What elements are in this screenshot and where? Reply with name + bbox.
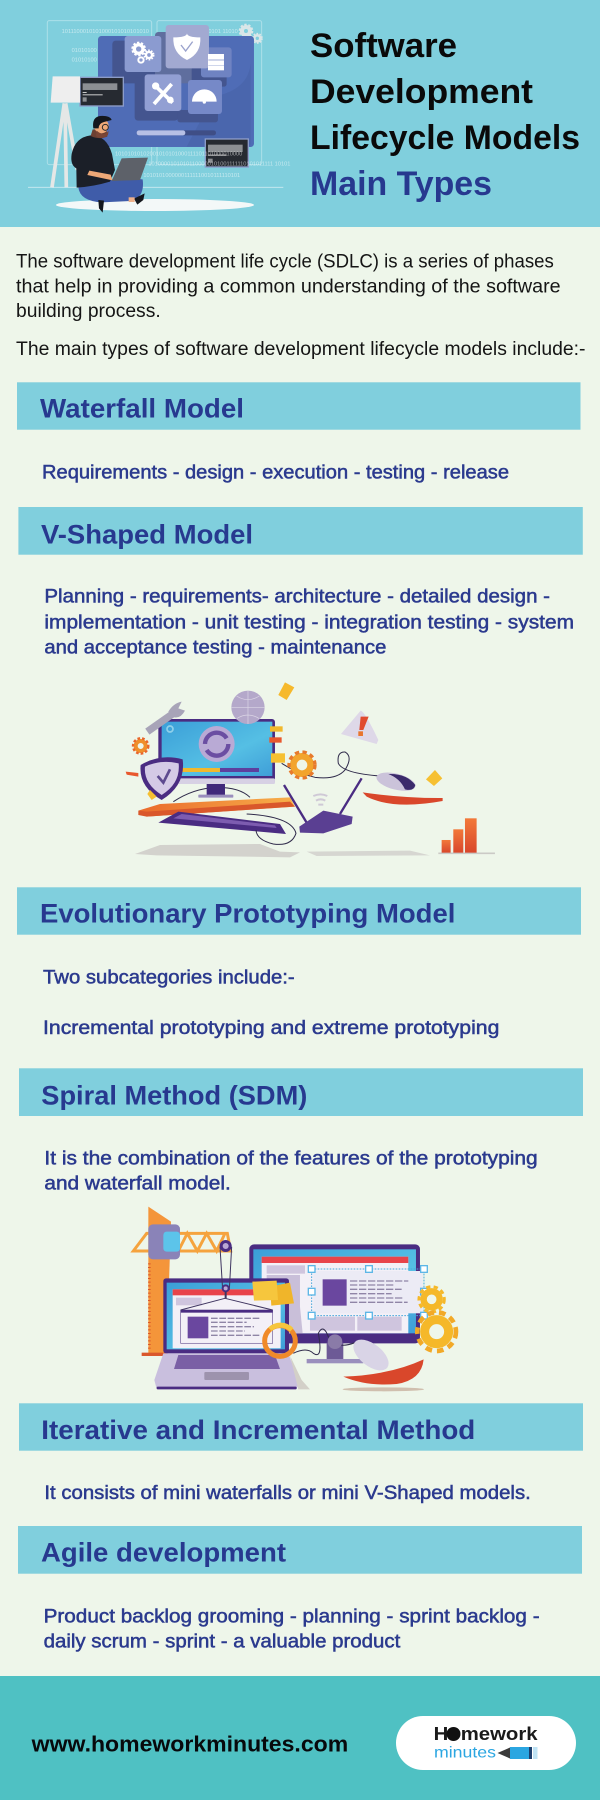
- intro text: building process.: [16, 301, 161, 322]
- heading: Agile development: [41, 1538, 286, 1568]
- illustration: developer with laptop: 10101010000001111110010111110101: [143, 173, 240, 179]
- band: [19, 1403, 583, 1451]
- band: [19, 1068, 583, 1116]
- illustration: computer, router and mouse: [126, 682, 495, 857]
- panel: Spiral Method (SDM): [19, 1068, 583, 1194]
- panel: Evolutionary Prototyping Model: [17, 887, 581, 1039]
- band: [17, 887, 581, 935]
- logo clock o: [446, 1727, 460, 1741]
- band: [17, 382, 580, 430]
- body text: Two subcategories include:-: [43, 967, 295, 988]
- title: Main Types: [310, 165, 492, 203]
- body text: daily scrum - sprint - a valuable product: [44, 1631, 401, 1652]
- body text: [43, 967, 499, 1039]
- logo pill: [396, 1716, 576, 1770]
- illustration: developer with laptop: 1011100010101000101010101010: [62, 29, 149, 35]
- heading: Waterfall Model: [40, 394, 244, 424]
- body text: implementation - unit testing - integration testing - system: [44, 612, 574, 633]
- body text: Requirements - design - execution - testing - release: [42, 462, 509, 483]
- illustration: developer with laptop: 01010100: [72, 48, 97, 54]
- heading: V-Shaped Model: [41, 519, 253, 549]
- panel: V-Shaped Model: [18, 507, 583, 658]
- heading: Evolutionary Prototyping Model: [40, 898, 455, 928]
- title: Development: [310, 73, 533, 111]
- body text: [44, 587, 574, 658]
- intro text: The main types of software development lifecycle models include:-: [16, 339, 586, 360]
- illustration: developer with laptop: 0101 11010: [208, 29, 238, 35]
- title: [310, 27, 580, 203]
- icon: pencil: [498, 1747, 538, 1759]
- footer background: [0, 1676, 600, 1800]
- logo minutes text: minutes: [434, 1745, 496, 1762]
- illustration: crane, laptop and monitor: [133, 1207, 456, 1391]
- band: [18, 1526, 582, 1574]
- heading: Spiral Method (SDM): [41, 1080, 307, 1110]
- body text: Incremental prototyping and extreme prototyping: [43, 1018, 499, 1039]
- panel: Agile development: [18, 1526, 582, 1652]
- band: [18, 507, 583, 555]
- logo wordmark: Homework: [434, 1724, 539, 1744]
- body text: and waterfall model.: [44, 1173, 231, 1194]
- body text: [44, 1148, 538, 1194]
- body text: It is the combination of the features of the prototyping: [44, 1148, 538, 1169]
- illustration: developer with laptop: 10101010102001010101000111101101000010000: [115, 151, 242, 157]
- body text: and acceptance testing - maintenance: [44, 637, 386, 658]
- title: Lifecycle Models: [310, 119, 580, 157]
- header panel: [0, 0, 600, 227]
- intro text: The software development life cycle (SDLC) is a series of phases: [16, 252, 554, 273]
- intro text: [16, 252, 586, 360]
- panel: Waterfall Model: [17, 382, 580, 483]
- body text: Planning - requirements- architecture - detailed design -: [44, 587, 550, 608]
- illustration: developer with laptop: [28, 21, 290, 213]
- panel: Iterative and Incremental Method: [19, 1403, 583, 1504]
- illustration: developer with laptop: 01010100: [72, 57, 97, 63]
- body text: [44, 1606, 540, 1652]
- heading: Iterative and Incremental Method: [41, 1415, 475, 1445]
- intro text: that help in providing a common understanding of the software: [16, 277, 561, 298]
- body text: Product backlog grooming - planning - sprint backlog -: [44, 1606, 540, 1627]
- footer: [0, 1676, 600, 1800]
- body text: It consists of mini waterfalls or mini V-Shaped models.: [44, 1483, 531, 1504]
- title: Software: [310, 27, 457, 65]
- illustration: developer with laptop: 10100001010101100000101001111110101011111 10101: [148, 162, 290, 168]
- header background: [0, 0, 600, 227]
- website url: www.homeworkminutes.com: [31, 1732, 348, 1757]
